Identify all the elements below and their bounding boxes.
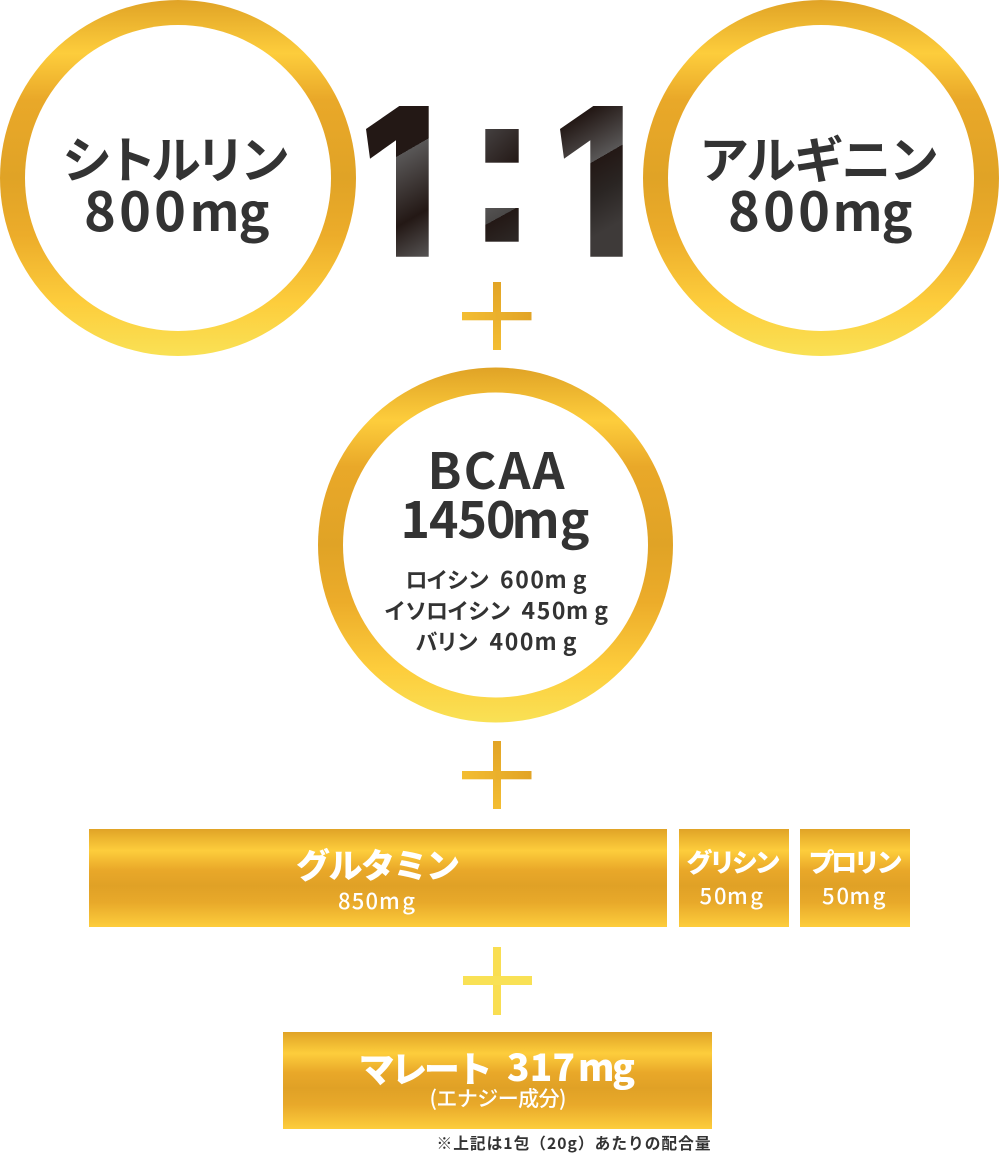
footnote: ※上記は1包（20g）あたりの配合量 — [436, 1131, 711, 1154]
label: isoleucine: mg — [566, 592, 608, 626]
label: glycine amount: mg — [727, 879, 763, 911]
label: arginine amount — [728, 168, 912, 247]
circle: citrulline — [0, 0, 356, 356]
label: isoleucine: 450 — [522, 592, 566, 626]
label: leucine: 600 — [500, 561, 544, 595]
ratio: 1:1 — [366, 106, 623, 257]
label: malate name and amount: マレート — [358, 1041, 492, 1093]
label: citrulline name: シトルリン — [62, 121, 290, 193]
label: glutamine name: グルタミン — [296, 839, 460, 888]
label: citrulline amount: mg — [190, 171, 270, 246]
label: glycine amount — [700, 879, 763, 911]
label: valine: バリン — [416, 625, 478, 657]
label: BCAA total: mg — [512, 481, 590, 553]
label: valine — [416, 623, 577, 657]
label: valine: mg — [534, 623, 577, 657]
label: arginine name: アルギニン — [699, 121, 939, 193]
bar: malate — [283, 1032, 712, 1129]
colon: top dot — [485, 129, 519, 163]
label: leucine — [406, 561, 587, 595]
label: proline amount: mg — [850, 879, 886, 911]
bar: glycine — [679, 829, 789, 927]
label: arginine amount: 800 — [728, 168, 830, 247]
label: glutamine amount — [338, 884, 415, 916]
numeral: left 1 — [366, 106, 429, 257]
colon: bottom dot — [485, 208, 519, 242]
label: BCAA total — [400, 481, 590, 553]
numeral: right 1 — [560, 106, 623, 257]
label: leucine: ロイシン — [406, 563, 490, 595]
circle: BCAA — [318, 368, 673, 722]
label: malate name and amount: 317 — [507, 1038, 575, 1092]
label: malate name and amount: mg — [578, 1038, 635, 1092]
label: isoleucine — [384, 592, 608, 626]
plus sign 1 — [462, 282, 532, 350]
bar: glutamine — [89, 829, 667, 927]
label: proline amount — [822, 879, 886, 911]
plus sign 2 — [462, 741, 532, 809]
label: proline name: プロリン — [808, 843, 902, 880]
label: malate name and amount — [358, 1038, 635, 1093]
label: BCAA total: 1450 — [400, 481, 516, 553]
label: proline amount: 50 — [822, 879, 849, 911]
label: glycine name: グリシン — [686, 843, 780, 880]
label: glycine amount: 50 — [700, 879, 726, 911]
bar: proline — [800, 829, 910, 927]
label: leucine: mg — [544, 561, 587, 595]
label: arginine amount: mg — [832, 171, 912, 246]
label: isoleucine: イソロイシン — [384, 594, 511, 626]
label: glutamine amount: 850 — [338, 884, 378, 916]
label: citrulline amount: 800 — [84, 168, 186, 247]
plus sign 3 — [463, 947, 532, 1015]
label: valine: 400 — [490, 623, 534, 657]
label: citrulline amount — [84, 168, 270, 247]
circle: arginine — [643, 0, 999, 356]
label: energy component: (エナジー成分) — [430, 1083, 566, 1113]
label: BCAA: BCAA — [428, 432, 565, 504]
label: glutamine amount: mg — [379, 884, 415, 916]
